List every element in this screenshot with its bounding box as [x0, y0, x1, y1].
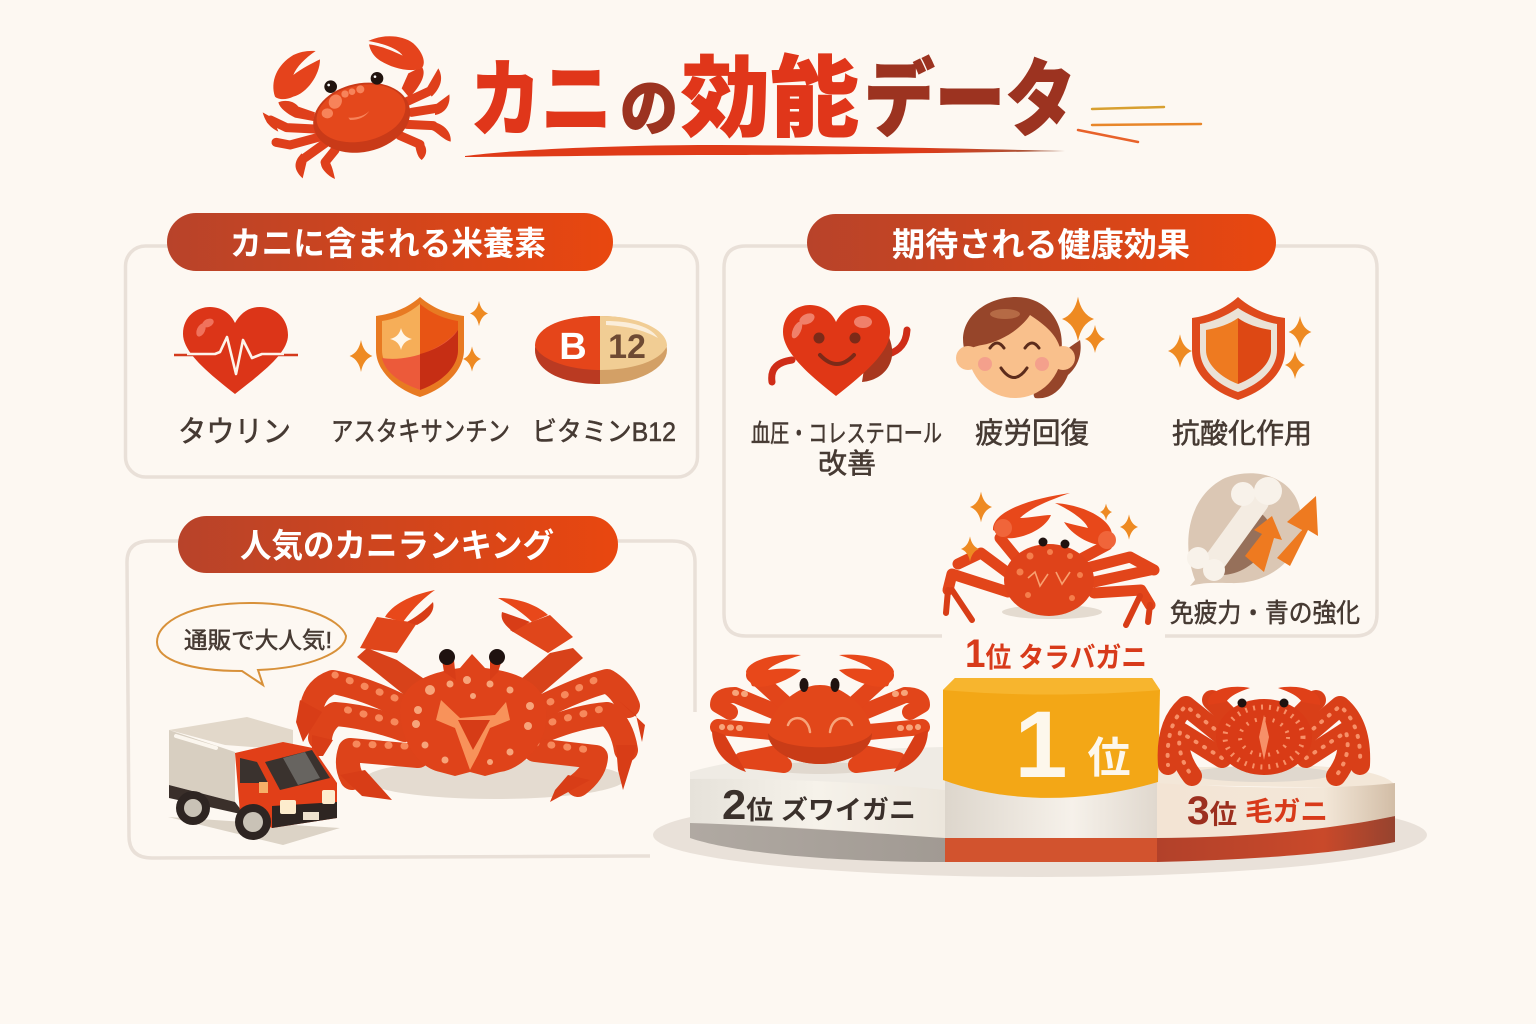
label: taurine: タウリン — [178, 416, 291, 449]
label: third place — [1187, 789, 1328, 833]
podium — [653, 678, 1427, 877]
heading: nutrients: カニに含まれる米養素 — [230, 225, 546, 262]
icon: smiling heart — [772, 305, 907, 396]
label: immunity: 免疲力・青の強化 — [1170, 598, 1360, 628]
icon: B12 capsule: 12 — [608, 328, 646, 366]
title — [470, 49, 1076, 148]
speed lines — [1078, 107, 1201, 142]
icon: B12 capsule — [535, 316, 667, 384]
label: vitamin B12: ビタミンB12 — [532, 417, 676, 447]
panel: nutrients — [126, 213, 698, 477]
label: antioxidant: 抗酸化作用 — [1172, 418, 1312, 449]
left claw — [357, 648, 430, 697]
title: データ — [864, 53, 1076, 147]
right claw — [518, 648, 583, 695]
label: first place: 1位 タラバガニ — [965, 632, 1147, 676]
podium step: first place — [943, 678, 1160, 862]
icon: heart with pulse — [174, 307, 298, 394]
icon: happy face — [956, 297, 1105, 398]
title underline swoosh — [465, 145, 1065, 157]
label: blood pressure: 改善 — [818, 448, 876, 479]
podium step: third place — [1157, 765, 1395, 862]
heading: nutrients — [167, 213, 613, 271]
panel: health effects — [724, 214, 1377, 636]
podium step: first place: 1 — [1015, 692, 1067, 798]
icon: shield with sparkles — [350, 297, 488, 397]
label: astaxanthin: アスタキサンチン — [331, 417, 510, 447]
icon: antioxidant shield — [1168, 297, 1311, 400]
title: の — [620, 75, 678, 144]
podium step: first place: 位 — [1088, 735, 1130, 783]
header crab icon — [263, 36, 451, 179]
label: second place: 2位 ズワイガニ — [722, 781, 916, 828]
panel: ranking — [127, 516, 695, 858]
heading: ranking — [178, 516, 618, 573]
callout: speech bubble: 通販で大人気! — [184, 627, 332, 653]
label: blood pressure — [751, 420, 942, 479]
podium step: second place — [690, 747, 945, 862]
crab: tarabagani — [946, 492, 1154, 625]
title: 効能 — [681, 49, 859, 148]
crab: zuwaigani — [712, 655, 928, 774]
label: blood pressure: 血圧・コレステロール — [751, 420, 942, 448]
podium shadow — [653, 793, 1427, 877]
label: fatigue recovery: 疲労回復 — [975, 417, 1089, 450]
crab: kegani — [1168, 687, 1360, 782]
icon: B12 capsule: B — [559, 326, 587, 368]
icon: bone with arrows — [1187, 473, 1318, 586]
callout: speech bubble — [157, 603, 346, 685]
heading: health effects — [807, 214, 1276, 271]
icon: delivery truck — [168, 717, 340, 845]
heading: ranking: 人気のカニランキング — [240, 527, 554, 564]
title: カニ — [470, 53, 612, 147]
illustration: large crab — [296, 590, 645, 802]
heading: health effects: 期待される健康効果 — [892, 226, 1190, 263]
label: third place: 3位 — [1187, 789, 1237, 833]
label: third place: 毛ガニ — [1245, 797, 1328, 827]
